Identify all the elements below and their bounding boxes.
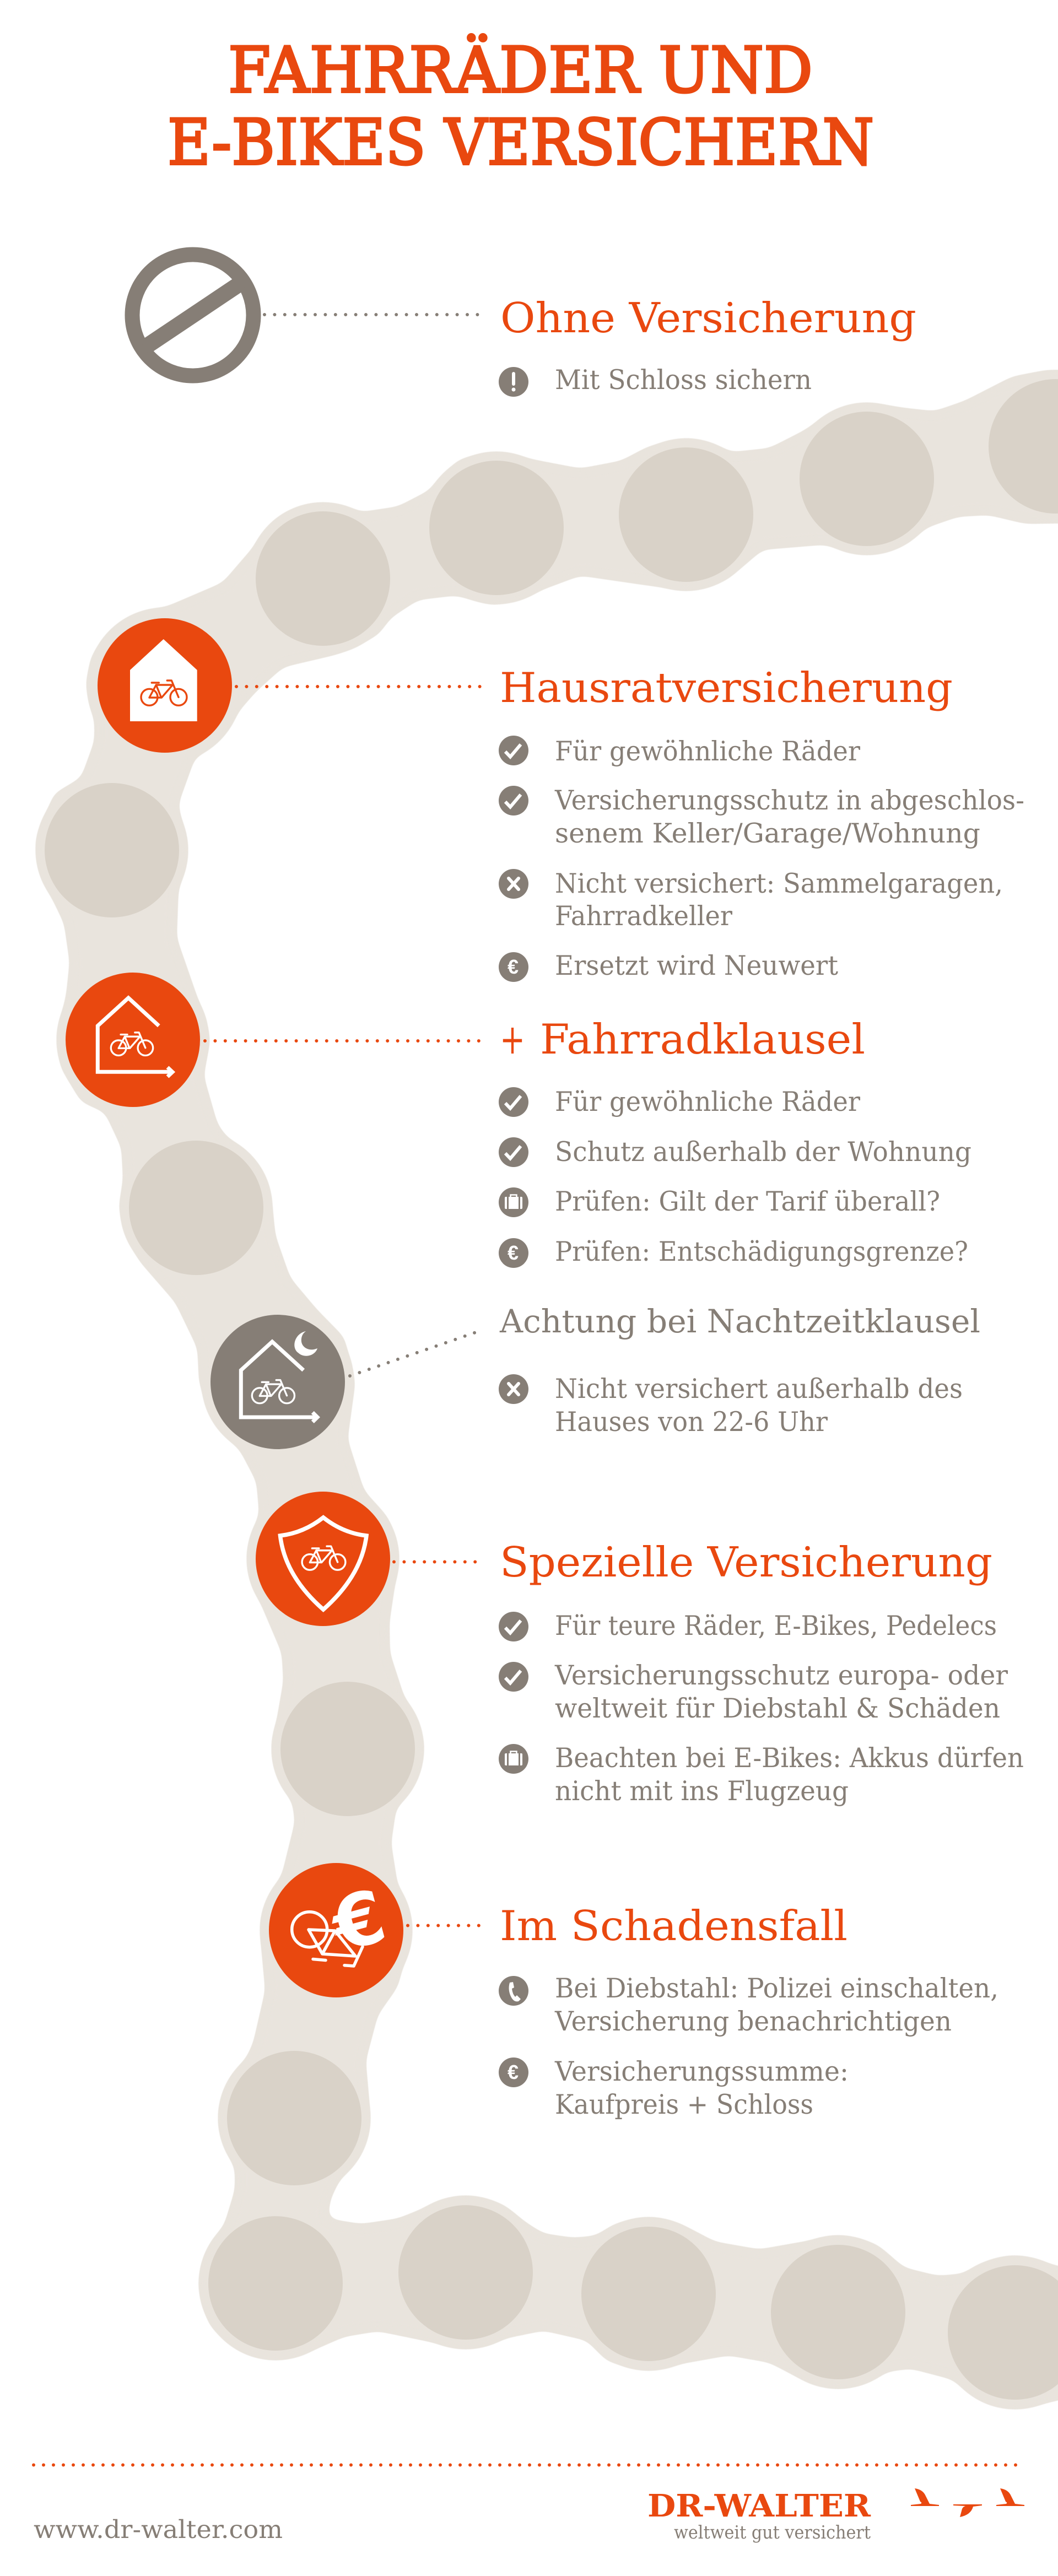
item: Beachten bei E-Bikes <box>499 1742 1024 1807</box>
item: Versicherungsschutz in abgeschlossenem Keller: Versicherungsschutz in abgeschlos- <box>554 785 1024 816</box>
list: Hausrat items <box>499 736 1024 982</box>
dotted connector: Fahrradklausel <box>205 1039 481 1043</box>
item: Versicherungssumme: Kaufpreis + Schloss <box>555 2089 813 2120</box>
title <box>168 34 874 179</box>
title: E-BIKES VERSICHERN <box>168 106 874 179</box>
item: Nicht versichert außerhalb des Hauses <box>499 1373 963 1438</box>
item: Nicht versichert außerhalb des Hauses: Nicht versichert außerhalb des <box>555 1373 963 1405</box>
icon: shield with bike <box>256 1492 390 1626</box>
item: Versicherungsschutz europa- oder weltweit: Versicherungsschutz europa- oder <box>554 1660 1008 1691</box>
item: Nicht versichert Sammelgaragen: Fahrradkeller <box>555 900 733 932</box>
footer dotted rule <box>34 2463 1025 2466</box>
item: Beachten bei E-Bikes: Beachten bei E-Bikes: Akkus dürfen <box>555 1742 1024 1774</box>
item: Versicherungsschutz europa- oder weltweit <box>499 1660 1008 1724</box>
item: Prüfen Entschädigungsgrenze: € <box>508 1241 519 1264</box>
dotted connector: Schadensfall <box>408 1924 481 1927</box>
list: Schadensfall items <box>499 1973 998 2120</box>
item: Prüfen Tarif: Prüfen: Gilt der Tarif überall? <box>555 1186 940 1217</box>
icon: prohibition sign <box>132 255 253 376</box>
icon: crashed bike with euro <box>269 1863 403 1997</box>
item: Versicherungsschutz in abgeschlossenem Keller: senem Keller/Garage/Wohnung <box>555 818 980 849</box>
icon: night house with moon <box>210 1315 345 1449</box>
heading: + Fahrradklausel: + <box>500 1015 525 1063</box>
item: Ersetzt wird Neuwert: Ersetzt wird Neuwert <box>555 950 838 981</box>
item: Nicht versichert Sammelgaragen <box>499 868 1003 932</box>
item: Beachten bei E-Bikes: nicht mit ins Flugzeug <box>555 1775 849 1807</box>
heading: + Fahrradklausel: Fahrradklausel <box>540 1015 865 1063</box>
icon: house outline with bike (Fahrradklausel) <box>66 973 200 1107</box>
heading: Ohne Versicherung: Ohne Versicherung <box>500 294 916 342</box>
logo: three birds <box>911 2488 1024 2517</box>
heading: Hausratversicherung: Hausratversicherung <box>500 663 953 712</box>
footer website: www.dr-walter.com <box>34 2515 283 2544</box>
dotted connector: Nachtzeitklausel <box>350 1331 481 1376</box>
list: Fahrradklausel items <box>499 1086 971 1268</box>
bicycle chain background <box>35 370 1058 2410</box>
item: Für gewöhnliche Räder: Für gewöhnliche Räder <box>555 736 861 767</box>
item: Schutz außerhalb der Wohnung: Schutz außerhalb der Wohnung <box>555 1136 971 1168</box>
icon: house with bike (Hausrat) <box>98 618 232 753</box>
title: FAHRRÄDER UND <box>228 34 813 107</box>
footer logo wordmark: weltweit gut versichert <box>674 2521 871 2543</box>
dotted connector: Spezielle Versicherung <box>394 1560 481 1564</box>
item: Für gewöhnliche Räder: Für gewöhnliche Räder <box>555 1086 861 1117</box>
footer logo wordmark: DR-WALTER <box>647 2488 871 2524</box>
item: Nicht versichert außerhalb des Hauses: Hauses von 22-6 Uhr <box>555 1406 828 1438</box>
item: Bei Diebstahl: Versicherung benachrichtigen <box>554 2006 952 2037</box>
item: Ersetzt wird Neuwert: € <box>508 955 519 978</box>
icon: crashed bike with euro: € <box>322 1873 395 1969</box>
heading: Achtung bei Nachtzeitklausel: Achtung bei Nachtzeitklausel <box>499 1303 980 1340</box>
item: Versicherungssumme <box>499 2056 849 2120</box>
dotted connector: ohne Versicherung <box>264 313 481 316</box>
item: Nicht versichert Sammelgaragen: Nicht versichert: Sammelgaragen, <box>555 868 1003 899</box>
item: Versicherungsschutz in abgeschlossenem Keller <box>499 785 1024 849</box>
item: Bei Diebstahl <box>499 1973 998 2037</box>
item: Versicherungsschutz europa- oder weltweit: weltweit für Diebstahl & Schäden <box>555 1693 1000 1724</box>
heading: Spezielle Versicherung: Spezielle Versicherung <box>500 1538 992 1586</box>
item: Mit Schloss sichern: Mit Schloss sichern <box>555 364 812 396</box>
item: Versicherungssumme: € <box>508 2061 519 2083</box>
heading: Im Schadensfall: Im Schadensfall <box>500 1902 848 1950</box>
item: Bei Diebstahl: Bei Diebstahl: Polizei einschalten, <box>555 1973 998 2004</box>
item: Prüfen Entschädigungsgrenze: Prüfen: Entschädigungsgrenze? <box>555 1236 968 1267</box>
footer logo wordmark <box>647 2488 871 2543</box>
dotted connector: Hausrat <box>236 685 481 688</box>
item: Versicherungssumme: Versicherungssumme: <box>554 2056 849 2087</box>
item: Für teure Räder: Für teure Räder, E-Bikes, Pedelecs <box>555 1610 997 1641</box>
list: Spezielle Versicherung items <box>499 1610 1024 1807</box>
